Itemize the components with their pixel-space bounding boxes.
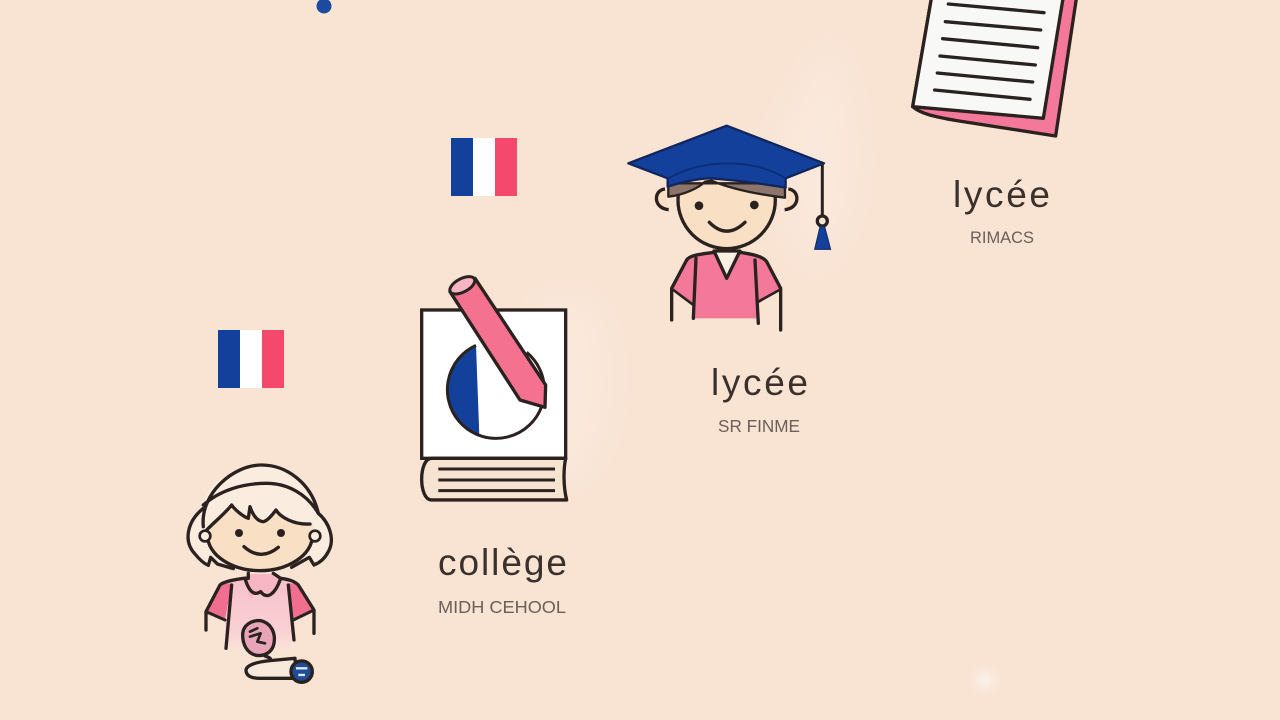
label: lycée, right xyxy=(953,174,1050,247)
label: lycée, right: lycée xyxy=(953,174,1050,215)
French flag: left xyxy=(218,330,284,388)
icon: graduate in cap xyxy=(628,126,831,330)
label: collège xyxy=(438,542,567,617)
decorative blue dot xyxy=(316,0,332,14)
label: lycée, centre: lycée xyxy=(711,362,808,403)
icon: girl student xyxy=(188,465,331,682)
label: lycée, centre xyxy=(711,362,808,436)
label: lycée, right: RIMACS xyxy=(970,228,1034,247)
label: lycée, centre: SR FINME xyxy=(718,416,800,436)
icon: open notebook xyxy=(913,0,1077,136)
icon: book with pencil xyxy=(422,273,567,500)
French flag: centre xyxy=(451,138,517,196)
label: collège: collège xyxy=(438,542,567,583)
label: collège: MIDH CEHOOL xyxy=(438,597,566,617)
